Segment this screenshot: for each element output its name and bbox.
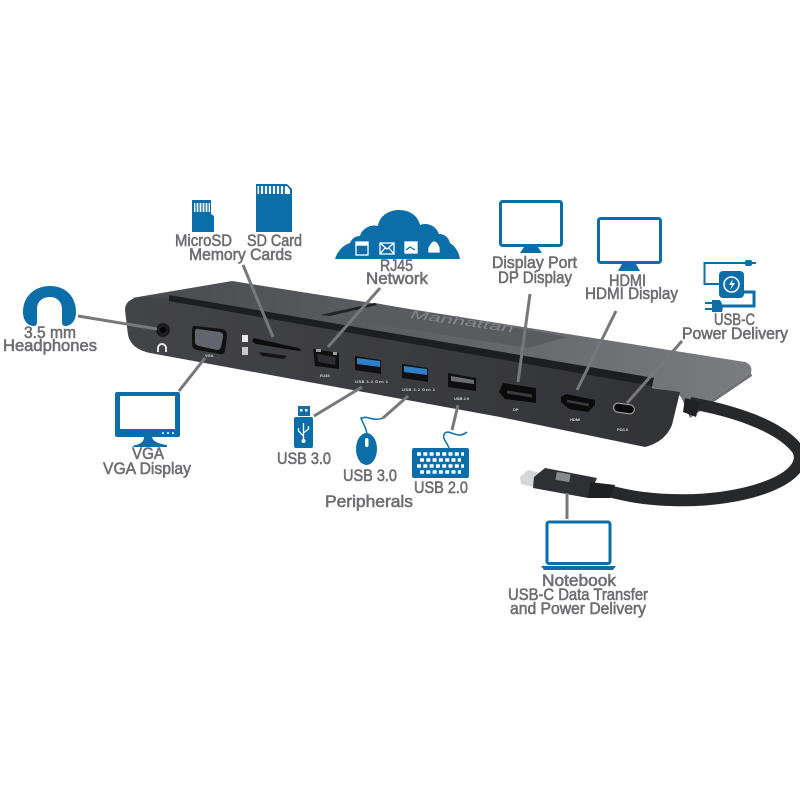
port: USB 3 right: USB 3.2 Gen 1 (402, 387, 436, 392)
port: USB-C (613, 403, 635, 432)
icon: headphones (23, 286, 76, 326)
label: USB 3.0 mouse: USB 3.0 (343, 466, 397, 485)
label: DisplayPort: Display Port (492, 253, 577, 272)
label: VGA display: VGA Display (103, 459, 191, 478)
icon: mouse (356, 417, 383, 465)
port: HDMI (561, 394, 595, 422)
label: USB 3.0: USB 3.0 (277, 449, 331, 468)
label: RJ45 network (366, 256, 428, 288)
icon: SD card (256, 184, 292, 232)
icon: USB-C power delivery (704, 260, 756, 312)
label: HDMI (585, 271, 678, 303)
label: RJ45 network: Network (366, 269, 428, 288)
port: HDMI: HDMI (570, 417, 580, 422)
port: VGA (192, 326, 227, 358)
icon: microSD card (192, 200, 214, 232)
label: notebook: USB-C Data Transfer (508, 585, 648, 604)
cable (608, 403, 800, 500)
label: DisplayPort: DP Display (498, 268, 572, 287)
label: memory cards: Memory Cards (189, 245, 292, 264)
icon: network cloud (335, 210, 460, 259)
docking station (125, 281, 752, 447)
USB-C connector (520, 398, 700, 498)
icon: VGA monitor (115, 392, 180, 447)
label: RJ45 network: RJ45 (380, 256, 413, 275)
label: USB-C power delivery: Power Delivery (682, 324, 788, 343)
label: VGA display (103, 444, 191, 478)
label: notebook (508, 571, 648, 618)
label: DisplayPort (492, 253, 577, 287)
label: headphones (3, 323, 97, 355)
icon: DisplayPort monitor (500, 202, 562, 253)
label: USB-C power delivery: USB-C (714, 310, 755, 329)
label: VGA display: VGA (132, 444, 165, 463)
port: DisplayPort: DP (513, 407, 519, 412)
port: card readers (242, 335, 301, 359)
port: DisplayPort (499, 383, 536, 412)
port: USB-C: PD3.0 (617, 427, 629, 432)
label: peripherals: Peripherals (325, 492, 413, 511)
icon: notebook (541, 522, 616, 570)
port: headphone jack (156, 323, 170, 352)
icon: HDMI monitor (598, 218, 660, 271)
label: headphones: 3.5 mm (24, 323, 76, 342)
label: HDMI: HDMI Display (585, 284, 678, 303)
label: memory cards (175, 231, 302, 264)
label: HDMI: HDMI (609, 271, 646, 290)
brand name: Manhattan (410, 307, 515, 336)
label: memory cards: SD Card (247, 231, 302, 250)
label: USB-C power delivery (682, 310, 788, 343)
port: VGA: VGA (205, 353, 214, 358)
icon: USB stick (294, 406, 313, 448)
port: USB 2.0 (448, 373, 476, 401)
label: USB 2.0: USB 2.0 (414, 478, 468, 497)
port: USB 3 right (402, 364, 436, 392)
port: RJ45 (313, 349, 339, 378)
port: USB 3 left (355, 356, 389, 384)
port: USB 2.0: USB 2.0 (454, 396, 470, 401)
label: notebook: Notebook (542, 571, 616, 590)
icon: keyboard (412, 432, 469, 478)
label: notebook: and Power Delivery (510, 599, 646, 618)
leader lines (78, 265, 682, 519)
port: RJ45: RJ45 (320, 373, 330, 378)
label: headphones: Headphones (3, 336, 97, 355)
label: memory cards: MicroSD (175, 231, 232, 250)
port: USB 3 left: USB 3.2 Gen 1 (355, 379, 389, 384)
